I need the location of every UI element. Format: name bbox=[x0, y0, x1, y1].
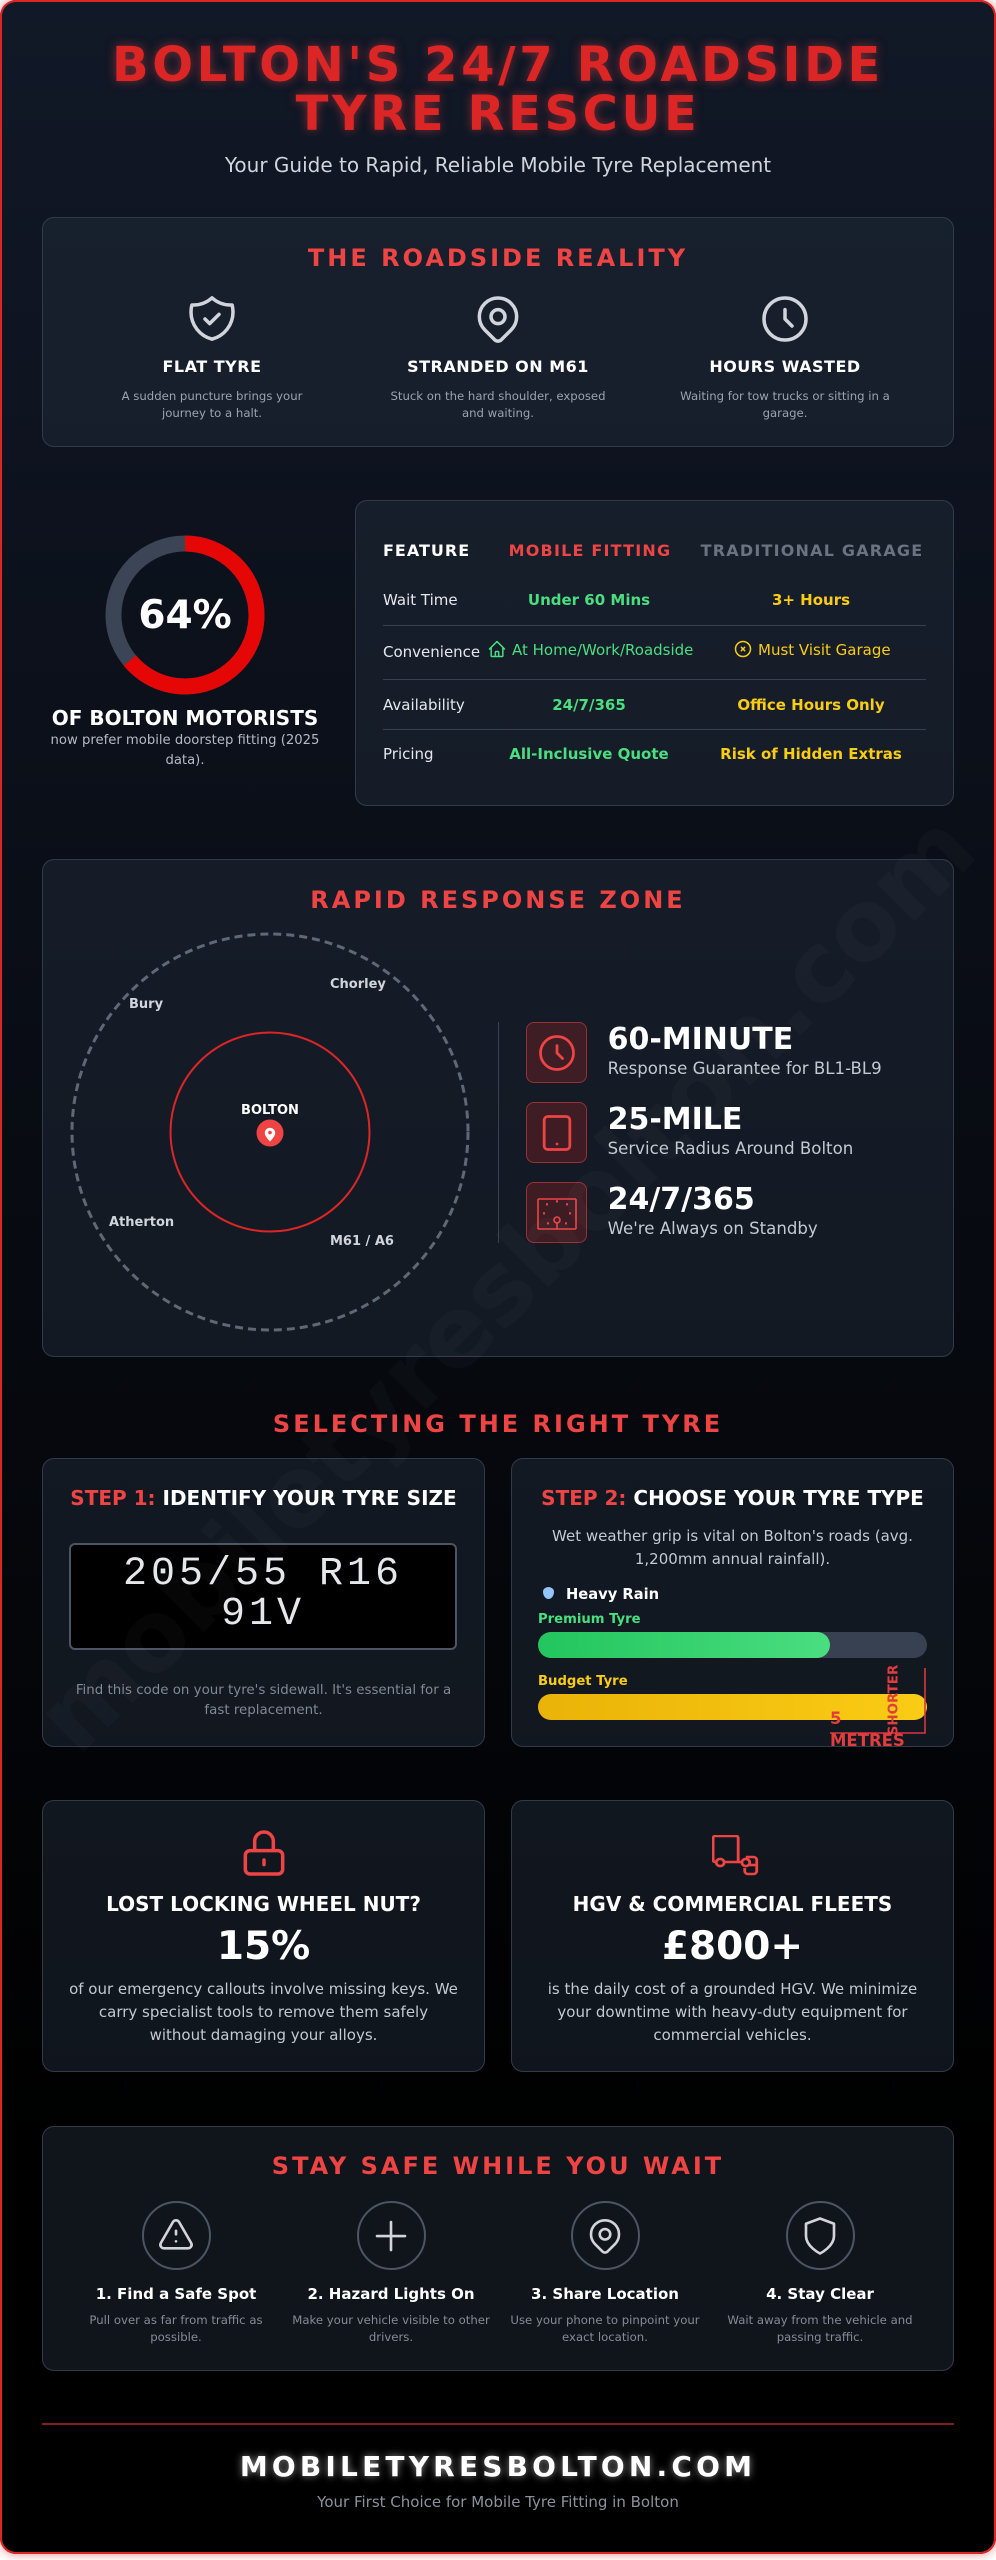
donut chart: 64 percent: 64% bbox=[138, 593, 232, 638]
row: pricing bbox=[383, 745, 902, 763]
text: wait away: passing traffic. bbox=[777, 2330, 863, 2344]
text: grounded hgv: your downtime with heavy-duty equipment for bbox=[557, 2003, 908, 2021]
text: wet weather: 1,200mm annual rainfall). bbox=[635, 1550, 830, 1568]
bar: budget tyre bbox=[538, 1674, 927, 1720]
map: service radius bbox=[70, 932, 470, 1332]
footer brand: MOBILETYRESBOLTON.COM bbox=[240, 2450, 756, 2483]
stat: 64 percent of bolton motorists bbox=[51, 536, 319, 768]
text: use your phone: Use your phone to pinpoint your bbox=[510, 2313, 700, 2327]
row: convenience bbox=[383, 640, 891, 661]
icon: plus bbox=[356, 2201, 426, 2270]
stat: 60-minute bbox=[526, 1022, 882, 1083]
title: TYRE RESCUE bbox=[296, 86, 700, 142]
text: sidewall caption bbox=[76, 1683, 451, 1718]
text: flat tyre description: journey to a halt. bbox=[162, 406, 262, 420]
row: wait time: 3+ Hours bbox=[772, 591, 850, 609]
text: hours wasted description bbox=[680, 389, 890, 420]
row: availability bbox=[383, 696, 885, 714]
row: pricing: Pricing bbox=[383, 745, 434, 763]
icon: warning triangle bbox=[142, 2201, 210, 2270]
panel: lost locking wheel nut bbox=[42, 1800, 485, 2072]
text: make visible bbox=[292, 2313, 490, 2344]
text: stranded description bbox=[390, 389, 606, 420]
text: sidewall caption: fast replacement. bbox=[204, 1703, 323, 1718]
heading: the roadside reality: THE ROADSIDE REALITY bbox=[308, 244, 688, 272]
row: wait time: Under 60 Mins bbox=[528, 591, 650, 609]
icon: clock tile bbox=[526, 1022, 587, 1083]
text: wait away bbox=[713, 2312, 927, 2346]
figure: 800 pounds: £800+ bbox=[662, 1924, 803, 1969]
heading: rapid response zone: RAPID RESPONSE ZONE bbox=[310, 886, 686, 914]
text: hours wasted description: garage. bbox=[763, 406, 807, 420]
row: availability: 24/7/365 bbox=[552, 696, 626, 714]
text: stat caption: now prefer mobile doorstep fitting (2025 bbox=[51, 733, 319, 748]
heading: selecting the right tyre: SELECTING THE RIGHT TYRE bbox=[273, 1410, 723, 1438]
row: availability: Availability bbox=[383, 696, 465, 714]
icon: tablet tile bbox=[526, 1102, 587, 1163]
panel: step 2 bbox=[511, 1458, 954, 1747]
footer tagline: Your First Choice for Mobile Tyre Fitting in Bolton bbox=[317, 2493, 679, 2511]
text: grounded hgv: is the daily cost of a grounded HGV. We minimize bbox=[548, 1980, 917, 1998]
text: sidewall caption: Find this code on your tyre's sidewall. It's essential for a bbox=[76, 1683, 451, 1698]
row: pricing: Risk of Hidden Extras bbox=[720, 745, 902, 763]
column: flat tyre bbox=[122, 296, 302, 420]
column: hours wasted bbox=[680, 296, 890, 420]
label: stranded on m61: STRANDED ON M61 bbox=[407, 357, 589, 376]
text: stat caption bbox=[51, 733, 319, 768]
label: hazard lights on: 2. Hazard Lights On bbox=[307, 2285, 475, 2303]
annotation: 5 metres shorter bbox=[830, 1664, 926, 1750]
label: stay clear: 4. Stay Clear bbox=[766, 2285, 874, 2303]
text: missing keys: without damaging your alloys. bbox=[150, 2026, 377, 2044]
row: convenience: Must Visit Garage bbox=[758, 641, 891, 659]
panel: stay safe while you wait bbox=[42, 2126, 954, 2371]
step 4: stay clear bbox=[713, 2201, 927, 2351]
bar: premium tyre bbox=[538, 1612, 927, 1658]
label: budget tyre: Budget Tyre bbox=[538, 1674, 628, 1689]
stat: 24/7/365 bbox=[526, 1182, 818, 1243]
row: pricing: All-Inclusive Quote bbox=[509, 745, 669, 763]
text: missing keys: of our emergency callouts involve missing keys. We bbox=[69, 1980, 458, 1998]
text: hours wasted description: Waiting for tow trucks or sitting in a bbox=[680, 389, 890, 403]
row: availability: Office Hours Only bbox=[737, 696, 885, 714]
table header row: FEATURE bbox=[383, 541, 470, 560]
label: share location: 3. Share Location bbox=[531, 2285, 679, 2303]
stat: 25-mile bbox=[526, 1102, 853, 1163]
heading: step 2: STEP 2: CHOOSE YOUR TYRE TYPE bbox=[541, 1486, 924, 1510]
text: stat caption: data). bbox=[165, 753, 205, 768]
icon: clock bbox=[762, 296, 808, 342]
title bbox=[110, 37, 884, 142]
step 3: share location bbox=[510, 2201, 700, 2344]
text: pull over: possible. bbox=[150, 2330, 202, 2344]
heading: step 1: STEP 1: IDENTIFY YOUR TYRE SIZE bbox=[70, 1486, 457, 1510]
heading: stay safe: STAY SAFE WHILE YOU WAIT bbox=[272, 2152, 724, 2180]
panel: the roadside reality bbox=[42, 217, 954, 447]
step 1: find a safe spot bbox=[89, 2201, 263, 2344]
text: service radius: Service Radius Around Bolton bbox=[608, 1139, 853, 1158]
column: stranded on m61 bbox=[390, 296, 606, 420]
panel: hgv and commercial fleets bbox=[511, 1800, 954, 2072]
tyre code display bbox=[69, 1543, 457, 1650]
text: make visible: drivers. bbox=[369, 2330, 413, 2344]
icon: home bbox=[488, 640, 506, 658]
text: missing keys: carry specialist tools to remove them safely bbox=[99, 2003, 428, 2021]
figure: 15 percent: 15% bbox=[217, 1924, 310, 1969]
text: grounded hgv bbox=[548, 1980, 917, 2044]
label: flat tyre: FLAT TYRE bbox=[162, 357, 262, 376]
subtitle: Your Guide to Rapid, Reliable Mobile Tyre Replacement bbox=[225, 153, 771, 177]
map: service radius: BOLTON bbox=[241, 1103, 299, 1118]
text: stranded description: and waiting. bbox=[462, 406, 534, 420]
annotation: 5 metres shorter: METRES bbox=[830, 1731, 905, 1750]
text: wet weather: Wet weather grip is vital on Bolton's roads (avg. bbox=[552, 1527, 913, 1545]
icon: padlock bbox=[244, 1830, 284, 1876]
table header row: TRADITIONAL GARAGE bbox=[701, 541, 923, 560]
label: find a safe spot: 1. Find a Safe Spot bbox=[96, 2285, 256, 2303]
text: use your phone: exact location. bbox=[562, 2330, 648, 2344]
row: wait time bbox=[383, 591, 850, 609]
icon: truck bbox=[712, 1835, 758, 1876]
label: of bolton motorists: OF BOLTON MOTORISTS bbox=[52, 706, 318, 730]
text: flat tyre description bbox=[122, 389, 302, 420]
figure: 60-minute: 60-MINUTE bbox=[608, 1022, 793, 1057]
tyre code display: 205/55 R16 bbox=[123, 1552, 403, 1597]
label: premium tyre: Premium Tyre bbox=[538, 1612, 641, 1627]
figure: 25-mile: 25-MILE bbox=[608, 1102, 742, 1137]
icon: standby tile bbox=[526, 1182, 587, 1243]
text: wait away: Wait away from the vehicle and bbox=[727, 2313, 913, 2327]
table header row: MOBILE FITTING bbox=[509, 541, 671, 560]
map: service radius: Chorley bbox=[330, 977, 386, 992]
annotation: 5 metres shorter: 5 bbox=[830, 1709, 841, 1728]
text: make visible: Make your vehicle visible to other bbox=[292, 2313, 490, 2327]
watermark: mobiletyresbolton.com bbox=[14, 791, 996, 1775]
text: flat tyre description: A sudden puncture brings your bbox=[122, 389, 302, 403]
panel: step 1 bbox=[42, 1458, 485, 1747]
heading: hgv and commercial fleets: HGV & COMMERCIAL FLEETS bbox=[573, 1892, 892, 1916]
donut chart: 64 percent bbox=[106, 536, 264, 694]
panel: comparison table bbox=[355, 500, 954, 806]
icon: map pin bbox=[478, 296, 518, 343]
heading: lost locking wheel nut: LOST LOCKING WHEEL NUT? bbox=[106, 1892, 421, 1916]
annotation: 5 metres shorter: SHORTER bbox=[886, 1664, 902, 1735]
icon: location pin bbox=[570, 2201, 640, 2270]
table header row bbox=[383, 541, 923, 560]
icon: shield bbox=[786, 2201, 854, 2270]
icon: rain drop bbox=[542, 1587, 554, 1599]
text: use your phone bbox=[498, 2312, 712, 2346]
text: response guarantee: Response Guarantee for BL1-BL9 bbox=[608, 1059, 882, 1078]
panel: rapid response zone bbox=[42, 859, 954, 1357]
step 2: hazard lights on bbox=[292, 2201, 490, 2344]
text: pull over bbox=[89, 2313, 263, 2344]
map: service radius: Atherton bbox=[109, 1215, 174, 1230]
text: missing keys bbox=[69, 1980, 458, 2044]
icon: shield check bbox=[189, 296, 235, 341]
text: pull over: Pull over as far from traffic as bbox=[89, 2313, 263, 2327]
row: convenience: Convenience bbox=[383, 643, 480, 661]
text: grounded hgv: commercial vehicles. bbox=[653, 2026, 812, 2044]
icon: x circle bbox=[734, 640, 752, 658]
text: standby: We're Always on Standby bbox=[608, 1219, 818, 1238]
tyre code display: 91V bbox=[221, 1592, 305, 1637]
label: heavy rain: Heavy Rain bbox=[566, 1586, 659, 1603]
text: wet weather bbox=[552, 1527, 913, 1568]
label: hours wasted: HOURS WASTED bbox=[709, 357, 861, 376]
figure: 24/7/365: 24/7/365 bbox=[608, 1182, 755, 1217]
title: BOLTON'S 24/7 ROADSIDE bbox=[112, 37, 884, 93]
row: convenience: At Home/Work/Roadside bbox=[512, 641, 693, 659]
text: stranded description: Stuck on the hard shoulder, exposed bbox=[390, 389, 606, 403]
map: service radius: M61 / A6 bbox=[330, 1234, 394, 1249]
map: service radius: Bury bbox=[129, 997, 164, 1012]
row: wait time: Wait Time bbox=[383, 591, 458, 609]
